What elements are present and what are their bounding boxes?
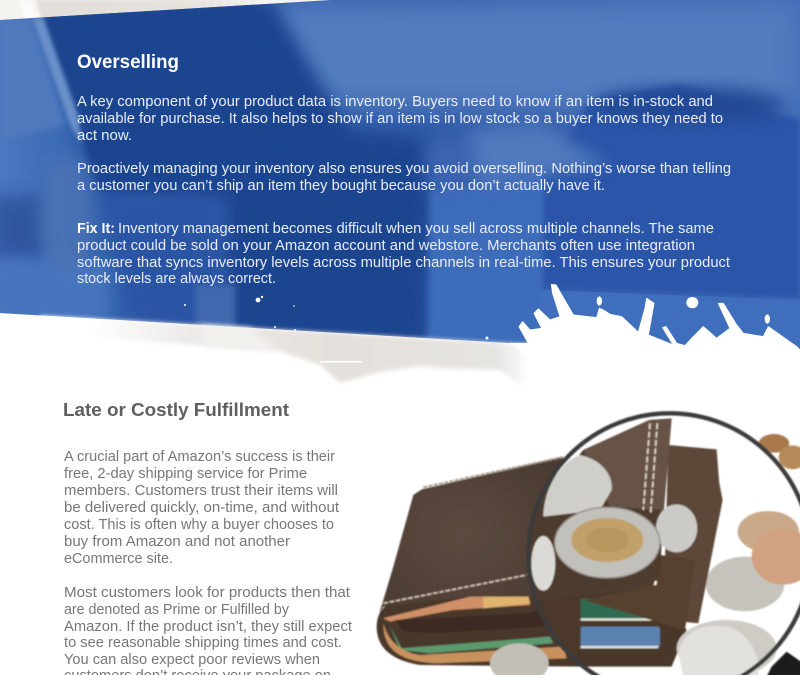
text block: Amazon shipping <box>64 449 339 567</box>
bimetal coin <box>555 507 660 578</box>
text block: customer expectations: Most customers look for products then that <box>64 585 350 601</box>
text block: inventory intro: act now. <box>77 128 132 144</box>
text block: proactive inventory: Proactively managing your inventory also ensures you avoid overselling. Nothing’s worse than telling <box>77 161 731 177</box>
text block: fix it: product could be sold on your Amazon account and webstore. Merchants often use integration <box>77 238 695 254</box>
text block: Amazon shipping: free, 2-day shipping service for Prime <box>64 466 307 482</box>
paint droplets <box>184 296 488 340</box>
wallet back flap <box>663 445 723 623</box>
top grey strip <box>0 0 340 25</box>
text block: inventory intro <box>77 94 723 144</box>
text block: inventory intro: A key component of your product data is inventory. Buyers need to know if an item is in-stock and <box>77 94 713 110</box>
lens handle <box>767 652 800 675</box>
lens ring <box>528 413 800 675</box>
wallet front flap <box>379 457 563 613</box>
text block: customer expectations: are denoted as Prime or Fulfilled by <box>64 602 290 618</box>
heading: Overselling: Overselling <box>77 52 179 73</box>
text block: Amazon shipping: A crucial part of Amazon’s success is their <box>64 449 335 465</box>
heading: Late or Costly Fulfillment: Late or Costly Fulfillment <box>63 400 289 420</box>
photo: wallet with coins under magnifying glass <box>377 413 800 675</box>
wallet bottom and pocket <box>377 587 687 667</box>
white paint splash <box>510 284 800 388</box>
text block: proactive inventory: a customer you can’t ship an item they bought because you don’t actually have it. <box>77 178 605 194</box>
text block: Amazon shipping: eCommerce site. <box>64 551 173 567</box>
text block: customer expectations: You can also expect poor reviews when <box>64 652 320 668</box>
cards <box>580 598 660 648</box>
text block: fix it: Fix It: <box>77 221 115 237</box>
text block: customer expectations: to see reasonable shipping times and cost. <box>64 635 342 651</box>
lens contents <box>528 418 697 667</box>
text block: fix it: software that syncs inventory levels across multiple channels in real-time. This ensures your product <box>77 255 730 271</box>
loose coins right <box>706 434 800 611</box>
panel: blue overselling background <box>0 0 800 360</box>
text block: fix it: Inventory management becomes difficult when you sell across multiple channels. The same <box>118 221 714 237</box>
lower right silver coin <box>677 620 777 675</box>
text block: inventory intro: available for purchase. It also helps to show if an item is in low stock so a buyer knows they need to <box>77 111 723 127</box>
stitching <box>383 575 647 603</box>
text block: fix it: stock levels are always correct. <box>77 271 276 287</box>
text block: customer expectations <box>64 585 352 675</box>
text block: Amazon shipping: cost. This is often why a buyer chooses to <box>64 517 334 533</box>
banknotes <box>383 588 567 663</box>
text block: Amazon shipping: be delivered quickly, on-time, and without <box>64 500 339 516</box>
text block: fix it <box>77 221 730 287</box>
text block: customer expectations: Amazon. If the product isn’t, they still expect <box>64 619 352 635</box>
text block: proactive inventory <box>77 161 731 194</box>
text block: Amazon shipping: members. Customers trust their items will <box>64 483 338 499</box>
grey shadow beneath blue panel <box>40 316 530 385</box>
wallet side fold <box>583 555 695 630</box>
text block: Amazon shipping: buy from Amazon and not another <box>64 534 290 550</box>
front silver coin <box>490 643 549 675</box>
